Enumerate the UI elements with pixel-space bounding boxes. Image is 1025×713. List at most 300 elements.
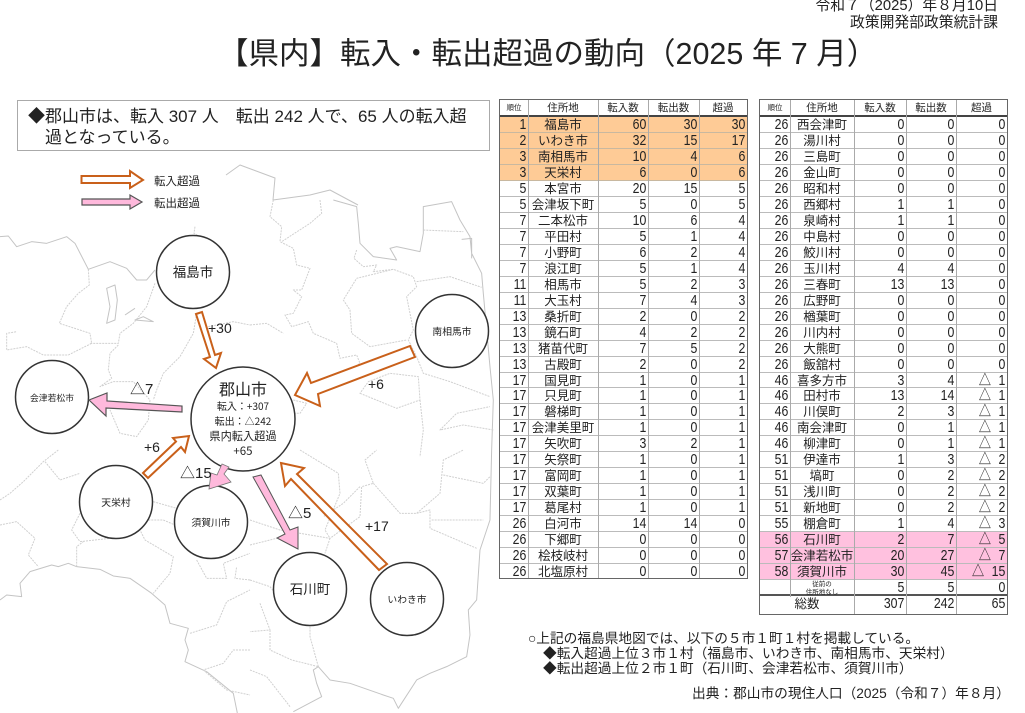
top inflow rows: 福島市 [544,114,582,133]
remaining rows: 15 [684,180,697,197]
top inflow rows: いわき市 [538,130,588,149]
middle rows: 伊達市 [803,449,841,468]
middle rows: 13 [941,276,954,293]
notes: ○上記の福島県地図では、以下の５市１町１村を掲載している。 [528,631,919,646]
remaining rows: 3 [640,435,646,452]
middle rows: 2 [948,499,954,516]
middle rows: 0 [999,116,1005,133]
remaining rows: 4 [739,260,745,277]
remaining rows: 1 [640,467,646,484]
middle rows: 0 [898,228,904,245]
middle rows: 金山町 [803,162,841,181]
remaining rows: 17 [513,372,526,388]
remaining rows: 1 [739,387,745,404]
remaining rows: 26 [513,515,526,532]
flow values: +17 [365,518,389,534]
remaining rows: 10 [633,212,646,229]
top outflow rows: 石川町 [803,529,841,548]
remaining rows: 1 [739,419,745,436]
arrow: 郡山市 to 須賀川市 [209,464,231,489]
notes: ◆転出超過上位２市１町（石川町、会津若松市、須賀川市） [543,661,913,676]
middle rows: 0 [898,340,904,357]
remaining rows: 浪江町 [544,258,582,277]
middle rows: 0 [999,308,1005,325]
circle: 石川町 [274,552,346,626]
middle rows: 0 [999,212,1005,229]
remaining rows: 0 [691,483,697,500]
middle rows: 0 [999,164,1005,181]
remaining rows: 1 [691,260,697,277]
circle: 会津若松市: 会津若松市 [30,391,74,404]
middle rows: 玉川村 [803,258,841,277]
remaining rows: 1 [739,483,745,500]
middle rows: 0 [999,244,1005,261]
middle rows: 26 [775,260,788,277]
top inflow rows: 1 [520,116,526,133]
map with arrows and circles [0,164,494,713]
middle rows: 0 [999,292,1005,309]
source: 出典：郡山市の現住人口（2025（令和７）年８月） [692,686,1010,701]
circle: 天栄村: 天栄村 [101,495,131,509]
middle rows: 2 [898,403,904,420]
unknown previous address row: 5 [898,579,904,596]
middle rows: 0 [999,228,1005,245]
remaining rows: 26 [513,563,526,580]
middle rows: 3 [948,451,954,468]
table header: 順位 [768,102,782,113]
remaining rows: 2 [691,244,697,261]
middle rows: 0 [948,292,954,309]
arrow: いわき市 to 郡山市 [281,463,387,570]
middle rows: 46 [775,372,788,388]
map: municipal boundaries [0,200,493,707]
middle rows: △ 1 [979,372,1005,388]
middle rows: 51 [775,451,788,468]
middle rows: 26 [775,164,788,181]
middle rows: 26 [775,244,788,261]
remaining rows: 1 [640,499,646,516]
top outflow rows: 57 [775,547,788,564]
circle: 須賀川市 [174,486,248,558]
remaining rows: 磐梯町 [544,401,582,420]
circle: 南相馬市: 南相馬市 [432,324,472,338]
date and department: 政策開発部政策統計課 [850,15,998,31]
middle rows: 51 [775,499,788,516]
legend: outflow arrow [82,195,142,209]
remaining rows: 2 [739,324,745,341]
middle rows: 3 [898,372,904,388]
middle rows: 46 [775,387,788,404]
remaining rows: 0 [691,356,697,373]
remaining rows: 17 [513,435,526,452]
top inflow rows: 南相馬市 [538,146,588,165]
remaining rows: 4 [739,228,745,245]
middle rows: 昭和村 [803,178,841,197]
unknown previous address row: 住所地なし [806,586,838,596]
middle rows: 0 [948,116,954,133]
middle rows: 0 [948,244,954,261]
circle: 南相馬市 [416,294,488,368]
remaining rows: 11 [514,292,526,309]
middle rows: △ 3 [979,515,1005,532]
middle rows: 田村市 [803,385,841,404]
top outflow rows: 須賀川市 [797,561,847,580]
middle rows: 46 [775,419,788,436]
remaining rows: 0 [691,547,697,564]
circle: 郡山市: 県内転入超過 [209,428,277,444]
middle rows: 0 [999,196,1005,213]
middle rows: 3 [948,403,954,420]
flow values: +6 [368,376,384,392]
circle: 福島市 [156,236,230,308]
remaining rows: 5 [640,276,646,293]
remaining rows: 0 [691,387,697,404]
middle rows: 喜多方市 [797,370,847,388]
remaining rows: 0 [691,372,697,388]
top inflow rows: 6 [739,164,745,181]
map: Fukushima prefecture outline [0,165,493,713]
remaining rows: 14 [633,515,646,532]
middle rows: 1 [948,212,954,229]
remaining rows: 1 [640,419,646,436]
remaining rows: 5 [520,180,526,197]
table header [500,100,747,117]
circle: 郡山市: 転出：△242 [215,413,272,428]
middle rows: 26 [775,196,788,213]
middle rows: 0 [898,435,904,452]
middle rows: 0 [948,324,954,341]
arrow: 郡山市 to 石川町 [253,475,298,549]
remaining rows: 只見町 [544,385,582,404]
remaining rows: 7 [640,340,646,357]
remaining rows: 0 [691,419,697,436]
middle rows: 0 [948,308,954,325]
middle rows: 1 [898,212,904,229]
top inflow rows: 4 [691,148,697,165]
remaining rows: 古殿町 [544,354,582,373]
top inflow rows: 0 [691,164,697,181]
middle rows: 川俣町 [803,401,841,420]
table: right ranking [759,99,1008,615]
middle rows: 西郷村 [803,194,841,213]
top outflow rows: 20 [891,547,904,564]
remaining rows: 矢祭町 [544,449,582,468]
remaining rows: 1 [739,467,745,484]
middle rows: 0 [948,228,954,245]
remaining rows: 2 [739,340,745,357]
middle rows: 26 [775,148,788,165]
remaining rows: 本宮市 [544,178,582,197]
top outflow rows: 56 [775,531,788,548]
remaining rows: 2 [691,435,697,452]
circle: 会津若松市 [16,360,88,434]
circle: 郡山市 [191,367,295,471]
remaining rows: 2 [640,308,646,325]
middle rows: 飯舘村 [803,354,841,373]
remaining rows: 5 [640,228,646,245]
middle rows: 三島町 [803,146,841,165]
unknown previous address row: 従前の [812,578,832,588]
middle rows: 中島村 [803,226,841,245]
remaining rows: 北塩原村 [538,561,588,580]
top outflow rows: △ 15 [972,563,1005,580]
table header: 順位 [506,102,522,113]
legend: inflow arrow [82,171,143,188]
notes: ◆転入超過上位３市１村（福島市、いわき市、南相馬市、天栄村） [543,646,954,661]
remaining rows: 5 [640,196,646,213]
middle rows: 4 [948,260,954,277]
middle rows: 鮫川村 [803,242,841,261]
table header: 住所地 [806,100,838,115]
middle rows: 0 [999,340,1005,357]
remaining rows: 会津美里町 [532,417,594,436]
circle: 須賀川市: 須賀川市 [191,515,231,529]
middle rows: 大熊町 [803,338,841,357]
middle rows: 55 [775,515,788,532]
remaining rows: 3 [739,276,745,293]
top inflow rows: 天栄村 [544,162,582,181]
total row: 307 [884,595,904,612]
remaining rows: 7 [640,292,646,309]
remaining rows: 7 [520,260,526,277]
top outflow rows: 58 [775,563,788,580]
remaining rows: 0 [739,563,745,580]
remaining rows: 17 [513,499,526,516]
remaining rows: 1 [739,451,745,468]
middle rows: 26 [775,276,788,293]
middle rows: 0 [898,324,904,341]
remaining rows: 2 [691,276,697,293]
middle rows: 1 [948,196,954,213]
remaining rows: 1 [640,403,646,420]
remaining rows: 4 [640,324,646,341]
remaining rows [500,178,747,580]
middle rows: 2 [948,483,954,500]
remaining rows: 2 [739,308,745,325]
remaining rows: 17 [513,387,526,404]
remaining rows: 0 [691,308,697,325]
middle rows: 0 [999,324,1005,341]
remaining rows: 17 [513,483,526,500]
remaining rows: 双葉町 [544,481,582,500]
remaining rows: 0 [640,563,646,580]
middle rows: 川内村 [803,322,841,341]
remaining rows: 1 [640,483,646,500]
remaining rows: 5 [691,340,697,357]
flow values: △5 [288,505,311,522]
top inflow rows: 30 [732,116,745,133]
remaining rows: 5 [739,196,745,213]
remaining rows: 1 [739,372,745,388]
remaining rows: 桧枝岐村 [538,545,588,564]
middle rows: 4 [948,515,954,532]
middle rows: 26 [775,180,788,197]
remaining rows: 国見町 [544,370,582,388]
remaining rows: 3 [739,292,745,309]
middle rows: △ 2 [979,499,1005,516]
arrow: 南相馬市 to 郡山市 [295,346,415,406]
remaining rows: 7 [520,212,526,229]
middle rows: △ 2 [979,483,1005,500]
remaining rows: 葛尾村 [544,497,582,516]
remaining rows: 0 [739,547,745,564]
remaining rows: 13 [513,340,526,357]
circle: 郡山市: 転入：+307 [217,398,270,413]
middle rows: 13 [891,387,904,404]
top outflow rows: 会津若松市 [791,545,853,564]
remaining rows: 2 [739,356,745,373]
remaining rows: 4 [739,212,745,229]
middle rows: 0 [948,340,954,357]
remaining rows: 相馬市 [544,274,582,293]
remaining rows: 26 [513,531,526,548]
arrow: 郡山市 to 会津若松市 [89,393,182,416]
remaining rows: 1 [640,451,646,468]
remaining rows: 17 [513,451,526,468]
remaining rows: 0 [691,467,697,484]
remaining rows: 0 [640,531,646,548]
middle rows: 1 [948,435,954,452]
middle rows: 2 [948,467,954,484]
remaining rows: 0 [691,403,697,420]
unknown previous address row: 5 [948,579,954,596]
remaining rows: 1 [739,499,745,516]
middle rows: 26 [775,340,788,357]
middle rows: 1 [948,419,954,436]
remaining rows: 5 [520,196,526,213]
circle: 郡山市: 郡山市 [219,376,267,400]
remaining rows: 17 [513,403,526,420]
middle rows: 14 [941,387,954,404]
top inflow rows: 60 [633,116,646,133]
top outflow rows: 2 [898,531,904,548]
middle rows: 51 [775,467,788,484]
remaining rows: 0 [691,451,697,468]
remaining rows: 7 [520,244,526,261]
middle rows: △ 1 [979,435,1005,452]
middle rows: 泉崎村 [803,210,841,229]
remaining rows: 二本松市 [538,210,588,229]
table header: 転入数 [864,100,896,115]
remaining rows: 26 [513,547,526,564]
total row [794,593,1005,612]
circle: 天栄村 [80,466,152,538]
middle rows: 26 [775,228,788,245]
remaining rows: 0 [739,515,745,532]
middle rows: 0 [948,132,954,149]
middle rows: 0 [898,499,904,516]
top inflow rows: 10 [633,148,646,165]
remaining rows: 平田村 [544,226,582,245]
middle rows: 0 [898,180,904,197]
remaining rows: 0 [691,196,697,213]
middle rows: 南会津町 [797,417,847,436]
middle rows: 0 [999,276,1005,293]
remaining rows: 1 [739,403,745,420]
middle rows: 13 [891,276,904,293]
top outflow rows: △ 5 [979,531,1005,548]
remaining rows: 0 [691,499,697,516]
summary box: 過となっている。 [45,128,180,147]
remaining rows: 2 [691,324,697,341]
table: left ranking [499,99,748,579]
top inflow rows: 30 [684,116,697,133]
middle rows: 26 [775,356,788,373]
table header: 超過 [712,100,734,115]
remaining rows: 0 [640,547,646,564]
remaining rows: 4 [739,244,745,261]
middle rows: 柳津町 [803,433,841,452]
flow values: +30 [208,320,232,336]
top outflow rows: 45 [941,563,954,580]
middle rows: 0 [999,148,1005,165]
middle rows: △ 2 [979,467,1005,484]
middle rows: 1 [898,451,904,468]
summary box: ◆郡山市は、転入 307 人 転出 242 人で、65 人の転入超 [28,107,467,126]
top inflow rows: 6 [640,164,646,181]
middle rows: 棚倉町 [803,513,841,532]
remaining rows: 富岡町 [544,465,582,484]
middle rows: 0 [898,164,904,181]
remaining rows: 大玉村 [544,290,582,309]
middle rows: 浅川町 [803,481,841,500]
middle rows: 新地町 [803,497,841,516]
remaining rows: 5 [640,260,646,277]
middle rows: 三春町 [803,274,841,293]
middle rows: 1 [898,196,904,213]
remaining rows: 17 [513,419,526,436]
remaining rows: 矢吹町 [544,433,582,452]
middle rows: 51 [775,483,788,500]
middle rows [760,114,1007,532]
top outflow rows: 27 [941,547,954,564]
table header: 転出数 [658,100,689,115]
remaining rows: 鏡石町 [544,322,582,341]
middle rows: 26 [775,116,788,133]
remaining rows: 下郷町 [544,529,582,548]
flow values: △7 [130,381,153,398]
remaining rows: 小野町 [544,242,582,261]
notes [528,631,954,676]
circle: いわき市 [370,562,444,636]
remaining rows: 0 [691,563,697,580]
unknown previous address row [760,580,1007,596]
remaining rows: 13 [513,324,526,341]
flow values [130,320,389,534]
circle: 郡山市: +65 [233,443,253,459]
middle rows: 0 [948,356,954,373]
remaining rows: 7 [520,228,526,245]
summary box [17,100,490,151]
top inflow rows: 3 [520,164,526,181]
middle rows: △ 1 [979,387,1005,404]
remaining rows: 1 [640,372,646,388]
circle: 福島市: 福島市 [173,261,213,281]
remaining rows: 0 [739,531,745,548]
middle rows: 0 [999,356,1005,373]
middle rows: 0 [898,483,904,500]
remaining rows: 14 [684,515,697,532]
middle rows: 0 [999,260,1005,277]
remaining rows: 1 [640,387,646,404]
legend labels: 転出超過 [154,195,200,211]
total row: 65 [992,595,1005,612]
middle rows: 湯川村 [803,130,841,149]
middle rows: 0 [898,308,904,325]
arrow: 天栄村 to 郡山市 [143,436,189,478]
top inflow rows: 17 [732,132,745,149]
middle rows: 0 [898,356,904,373]
